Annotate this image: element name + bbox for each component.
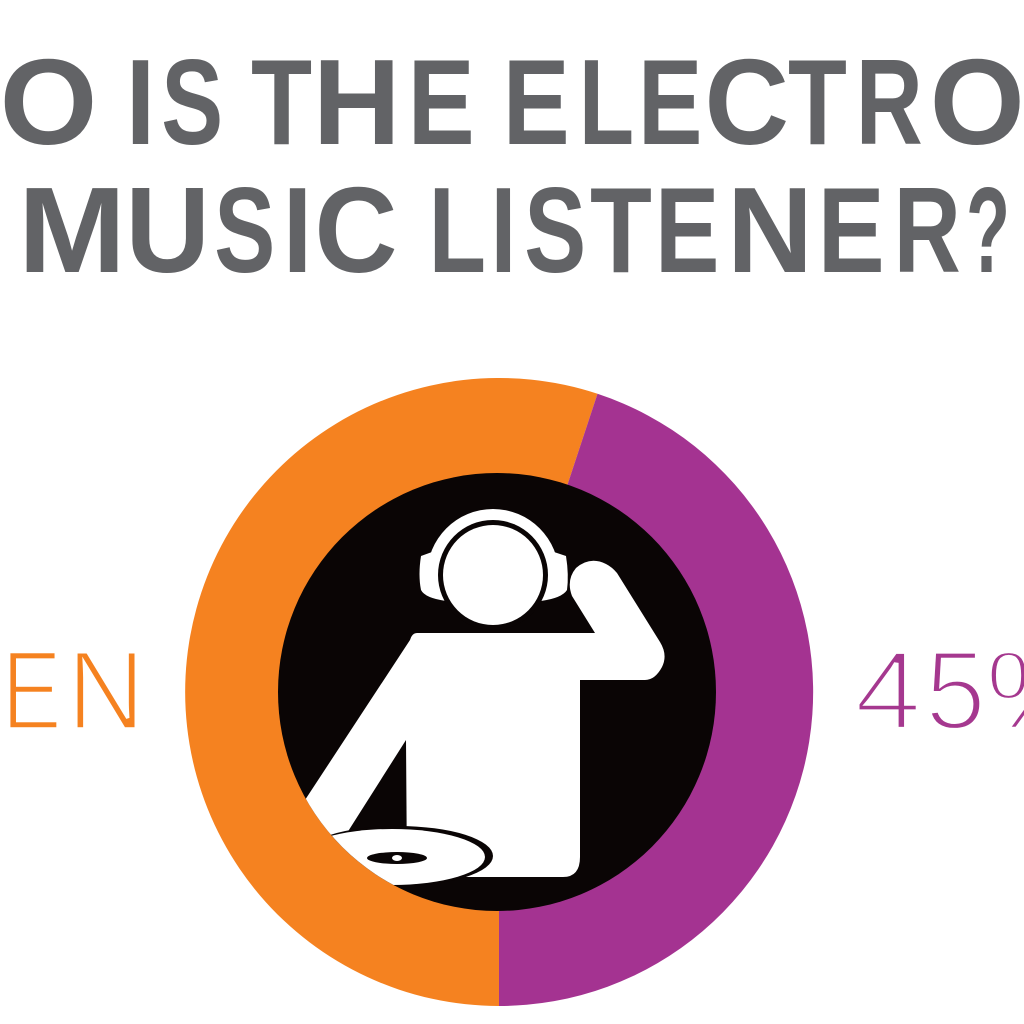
title line 2: I: [491, 162, 516, 298]
title line 1: E: [638, 34, 702, 170]
title line 1: O: [0, 34, 97, 170]
title line 1: T: [788, 34, 847, 170]
title line 2: S: [524, 162, 586, 298]
head: [443, 525, 543, 625]
title line 1: I: [126, 34, 155, 170]
headphones: [420, 509, 568, 601]
right ear cup: [542, 552, 568, 601]
left ear cup: [420, 552, 444, 601]
title line 2: E: [655, 162, 719, 298]
record: [332, 829, 485, 885]
title line 1: C: [704, 34, 789, 170]
title line 1: L: [579, 34, 634, 170]
label: men: N: [67, 628, 145, 753]
title line 2: S: [214, 162, 275, 298]
title line 2: M: [18, 162, 126, 298]
icon: DJ with headphones and record: [278, 473, 716, 911]
title line 1: T: [251, 34, 312, 170]
title line 1: E: [503, 34, 570, 170]
title line 2: N: [727, 162, 813, 298]
donut segment: purple 45%: [499, 394, 813, 1006]
label: 45%: 4: [854, 628, 922, 753]
title line 2: U: [125, 162, 210, 298]
label: 45%: 5: [925, 628, 986, 753]
title line 2: E: [818, 162, 885, 298]
title line 2: R: [894, 162, 961, 298]
title line 2: T: [590, 162, 652, 298]
spindle hole: [392, 855, 402, 861]
DJ figure: [290, 509, 665, 886]
title: [0, 34, 1024, 298]
title line 1: H: [313, 34, 401, 170]
donut chart: [185, 378, 813, 1006]
donut segment: orange 55%: [185, 378, 598, 1006]
body and arms: [290, 561, 665, 877]
title line 2: L: [429, 162, 486, 298]
title line 1: S: [161, 34, 223, 170]
title line 1: E: [408, 34, 475, 170]
record outline: [331, 826, 493, 886]
label: men: E: [2, 628, 62, 753]
title line 1: O: [930, 34, 1024, 170]
headphone band: [431, 509, 555, 556]
title line 1: R: [856, 34, 923, 170]
title line 2: C: [314, 162, 398, 298]
title line 2: I: [283, 162, 312, 298]
icon background circle: [278, 473, 716, 911]
headphone gap: [438, 520, 548, 601]
record spindle: [367, 852, 427, 864]
